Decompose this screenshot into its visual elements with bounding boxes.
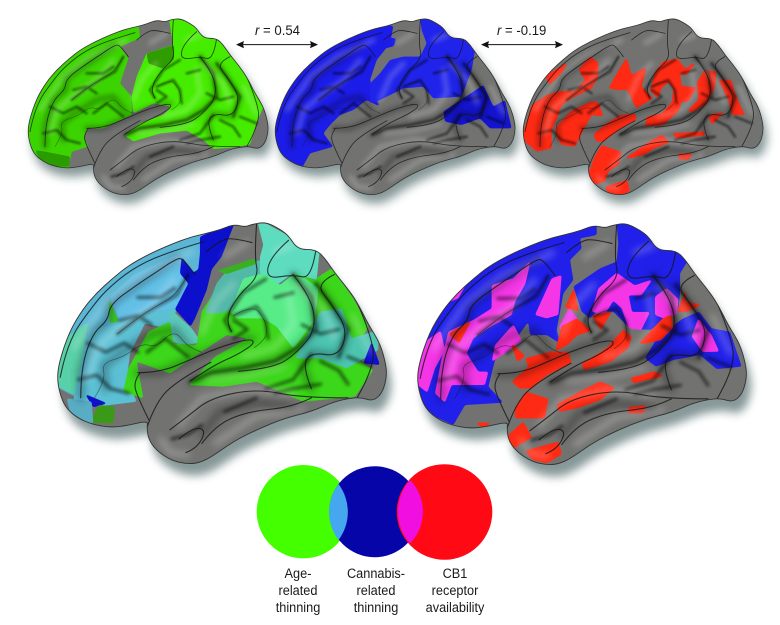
arrow and label: r = -0.19 [481, 23, 563, 48]
arrow and label: r = 0.54 [236, 23, 318, 48]
brain: CB1 receptor availability (red) [521, 18, 774, 210]
legend label: CB1 receptor availability: CB1 [443, 565, 467, 581]
legend label: age-related thinning: thinning [276, 599, 320, 615]
brain: cannabis and CB1 overlap [416, 223, 758, 483]
legend label: age-related thinning: related [279, 582, 317, 598]
legend label: age-related thinning: Age- [285, 565, 311, 581]
legend: overlapping circles [257, 464, 492, 560]
arrow and label: r = 0.54: r = 0.54 [255, 23, 300, 38]
arrow and label: r = -0.19: r = -0.19 [497, 23, 546, 38]
legend label: CB1 receptor availability: receptor [432, 582, 479, 598]
legend label: cannabis-related thinning: related [357, 582, 395, 598]
brain: cannabis-related thinning (blue) [274, 18, 524, 210]
legend label: cannabis-related thinning: Cannabis- [347, 565, 405, 581]
brain: age-related thinning (green) [26, 18, 277, 210]
legend label: cannabis-related thinning: thinning [354, 599, 398, 615]
brain: age and cannabis overlap [40, 210, 400, 476]
legend label: CB1 receptor availability: availability [426, 599, 485, 615]
